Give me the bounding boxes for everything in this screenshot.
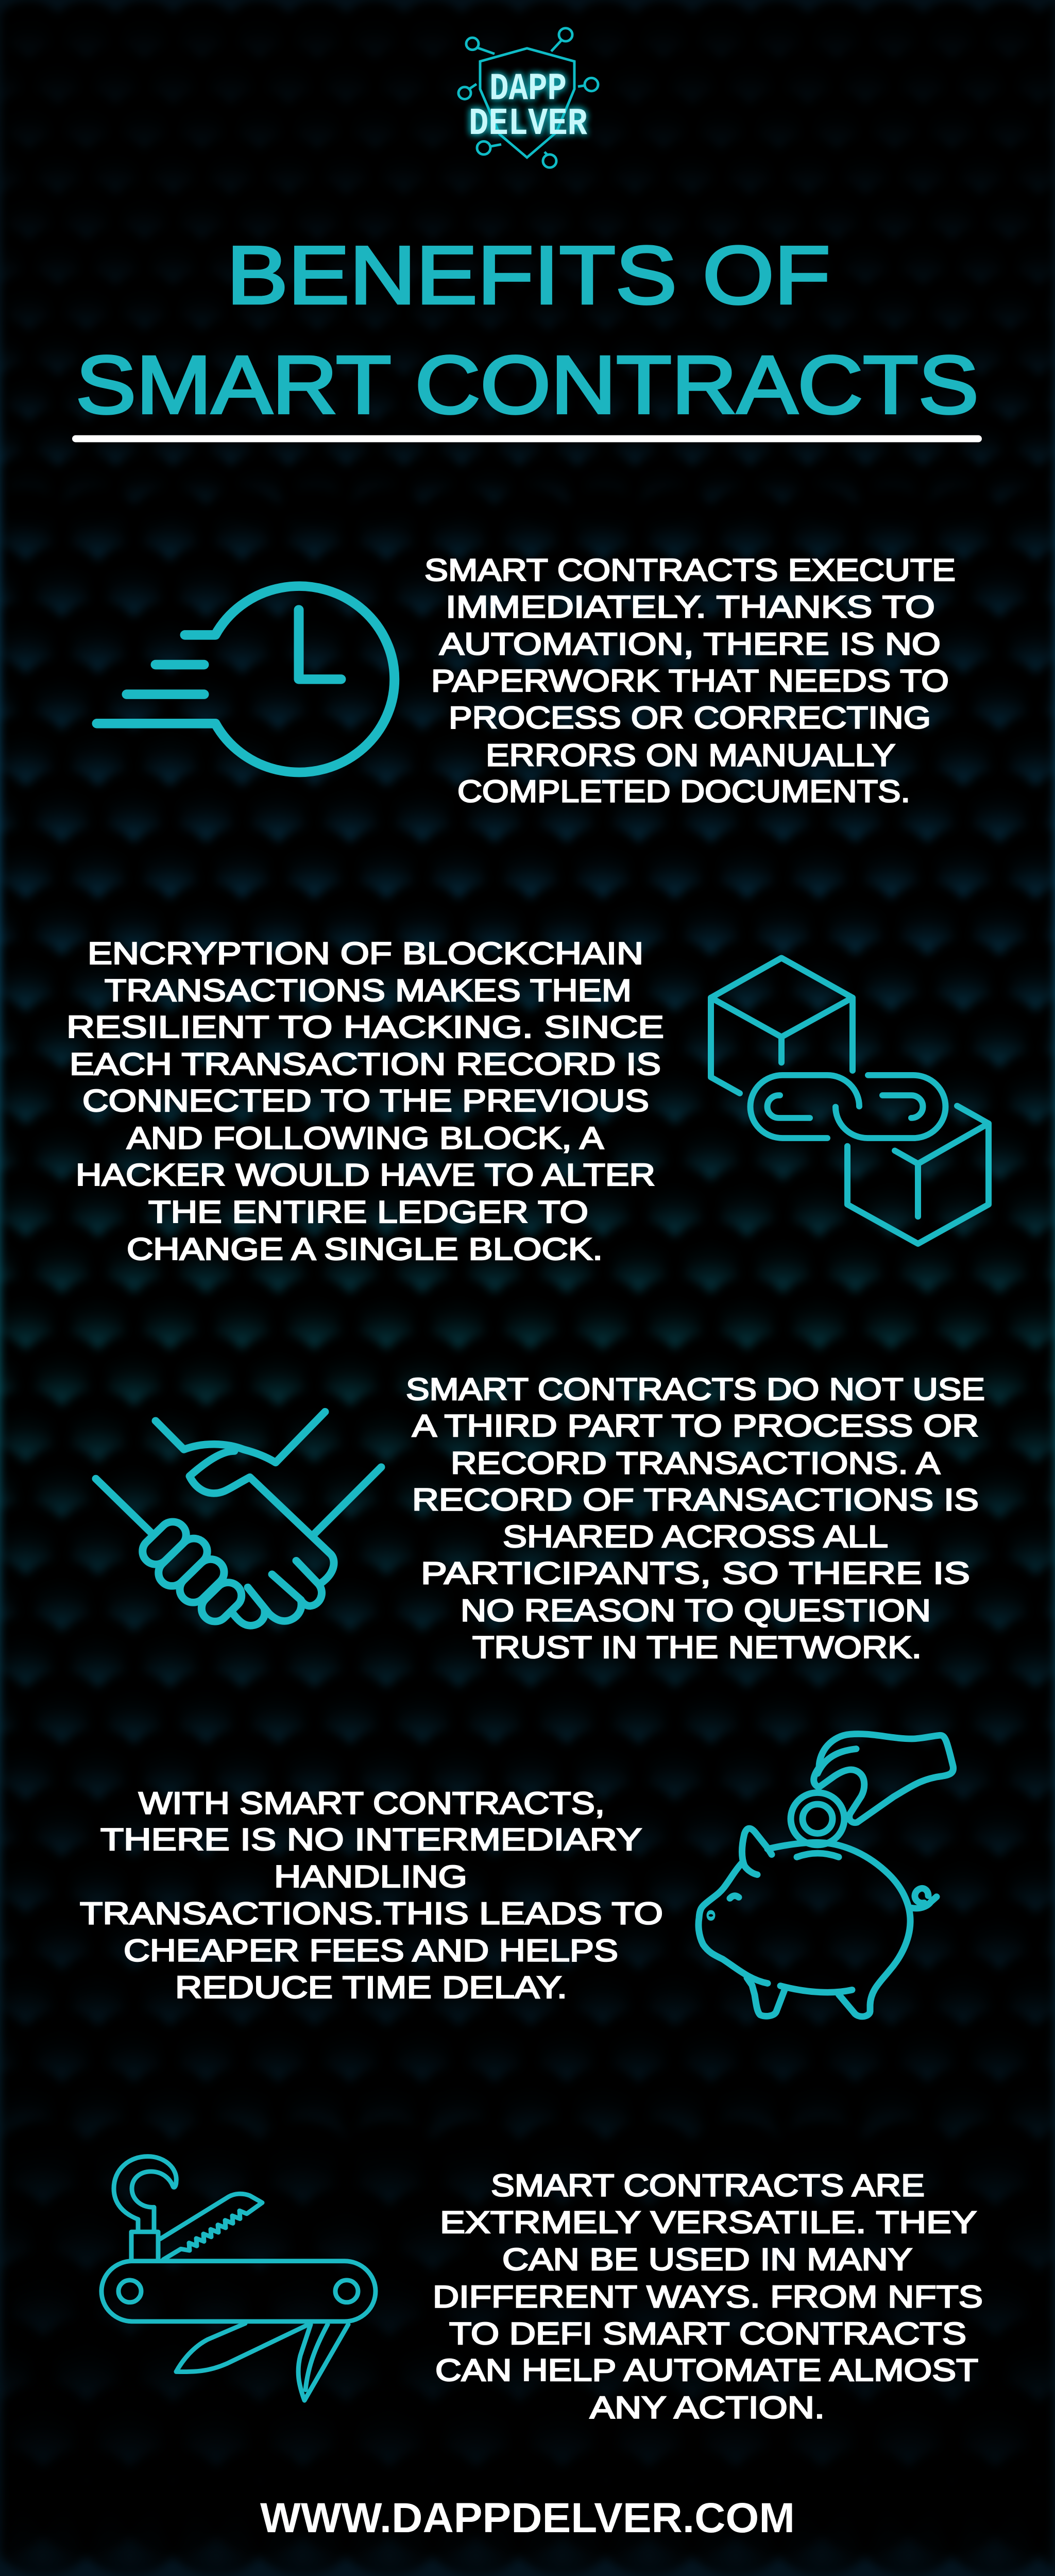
text: immediate execution [424, 553, 956, 808]
panel: immediate execution [97, 553, 956, 808]
text: hacking resilience [66, 936, 664, 1266]
text: hacking resilience: AND FOLLOWING BLOCK, A [127, 1121, 604, 1155]
text: immediate execution: ERRORS ON MANUALLY [486, 738, 895, 772]
text: versatility: TO DEFI SMART CONTRACTS [449, 2316, 966, 2351]
icon: handshake [96, 1412, 381, 1627]
text: immediate execution: PROCESS OR CORRECTING [449, 700, 931, 735]
icon: linked blocks [711, 958, 989, 1244]
text: trust: RECORD OF TRANSACTIONS IS [412, 1482, 979, 1517]
text: hacking resilience: RESILIENT TO HACKING. SINCE [66, 1010, 664, 1044]
text: versatility: EXTRMELY VERSATILE. THEY [440, 2205, 977, 2240]
text: cheaper fees: WITH SMART CONTRACTS, [139, 1786, 605, 1820]
text: versatility: SMART CONTRACTS ARE [491, 2168, 925, 2203]
text: cheaper fees: REDUCE TIME DELAY. [175, 1970, 567, 2005]
icon: fast clock [97, 586, 395, 772]
panel: trust [96, 1371, 985, 1665]
text: cheaper fees: CHEAPER FEES AND HELPS [124, 1933, 618, 1968]
title underline [72, 435, 982, 442]
panel: cheaper fees [80, 1734, 953, 2016]
text: versatility: CAN HELP AUTOMATE ALMOST [435, 2353, 978, 2387]
icon: piggy bank with coin [699, 1734, 953, 2016]
text: hacking resilience: HACKER WOULD HAVE TO ALTER [76, 1157, 655, 1192]
title: BENEFITS OF [227, 230, 830, 321]
text: immediate execution: IMMEDIATELY. THANKS TO [446, 589, 935, 624]
text: trust: RECORD TRANSACTIONS. A [451, 1446, 940, 1480]
website footer: WWW.DAPPDELVER.COM [260, 2494, 795, 2541]
text: immediate execution: PAPERWORK THAT NEEDS TO [431, 663, 949, 698]
text: trust: NO REASON TO QUESTION [461, 1593, 931, 1628]
icon: multi-tool knife [101, 2157, 376, 2400]
text: cheaper fees: THERE IS NO INTERMEDIARY [100, 1822, 642, 1857]
text: trust: A THIRD PART TO PROCESS OR [412, 1409, 979, 1443]
text: hacking resilience: EACH TRANSACTION RECORD IS [70, 1047, 661, 1081]
text: hacking resilience: ENCRYPTION OF BLOCKCHAIN [88, 936, 643, 971]
text: versatility: CAN BE USED IN MANY [502, 2242, 912, 2277]
text: hacking resilience: TRANSACTIONS MAKES THEM [105, 973, 632, 1008]
logo wordmark [469, 67, 587, 145]
text: immediate execution: COMPLETED DOCUMENTS. [457, 774, 910, 808]
panel: hacking resilience [66, 936, 989, 1266]
text: hacking resilience: CHANGE A SINGLE BLOCK. [127, 1231, 603, 1266]
logo wordmark: DAPP [489, 67, 567, 111]
logo: Dapp Delver shield [458, 28, 598, 167]
text: cheaper fees: HANDLING [274, 1859, 467, 1894]
icon: shield outline with network nodes [458, 28, 598, 167]
text: cheaper fees: TRANSACTIONS.THIS LEADS TO [80, 1896, 663, 1930]
text: immediate execution: SMART CONTRACTS EXECUTE [424, 553, 956, 587]
text: hacking resilience: THE ENTIRE LEDGER TO [148, 1195, 588, 1229]
text: versatility: DIFFERENT WAYS. FROM NFTS [433, 2279, 983, 2314]
logo wordmark: DELVER [469, 102, 587, 145]
text: cheaper fees [80, 1786, 663, 2005]
text: trust: PARTICIPANTS, SO THERE IS [421, 1556, 970, 1590]
title: SMART CONTRACTS [76, 339, 979, 431]
panel: versatility [101, 2157, 983, 2425]
text: trust: TRUST IN THE NETWORK. [472, 1630, 922, 1665]
text: trust: SHARED ACROSS ALL [503, 1519, 888, 1554]
title [76, 230, 979, 431]
text: versatility: ANY ACTION. [590, 2390, 825, 2425]
text: versatility [433, 2168, 983, 2425]
text: trust [406, 1371, 985, 1665]
text: immediate execution: AUTOMATION, THERE IS NO [439, 626, 941, 661]
text: hacking resilience: CONNECTED TO THE PREVIOUS [82, 1083, 649, 1118]
text: trust: SMART CONTRACTS DO NOT USE [406, 1371, 985, 1406]
